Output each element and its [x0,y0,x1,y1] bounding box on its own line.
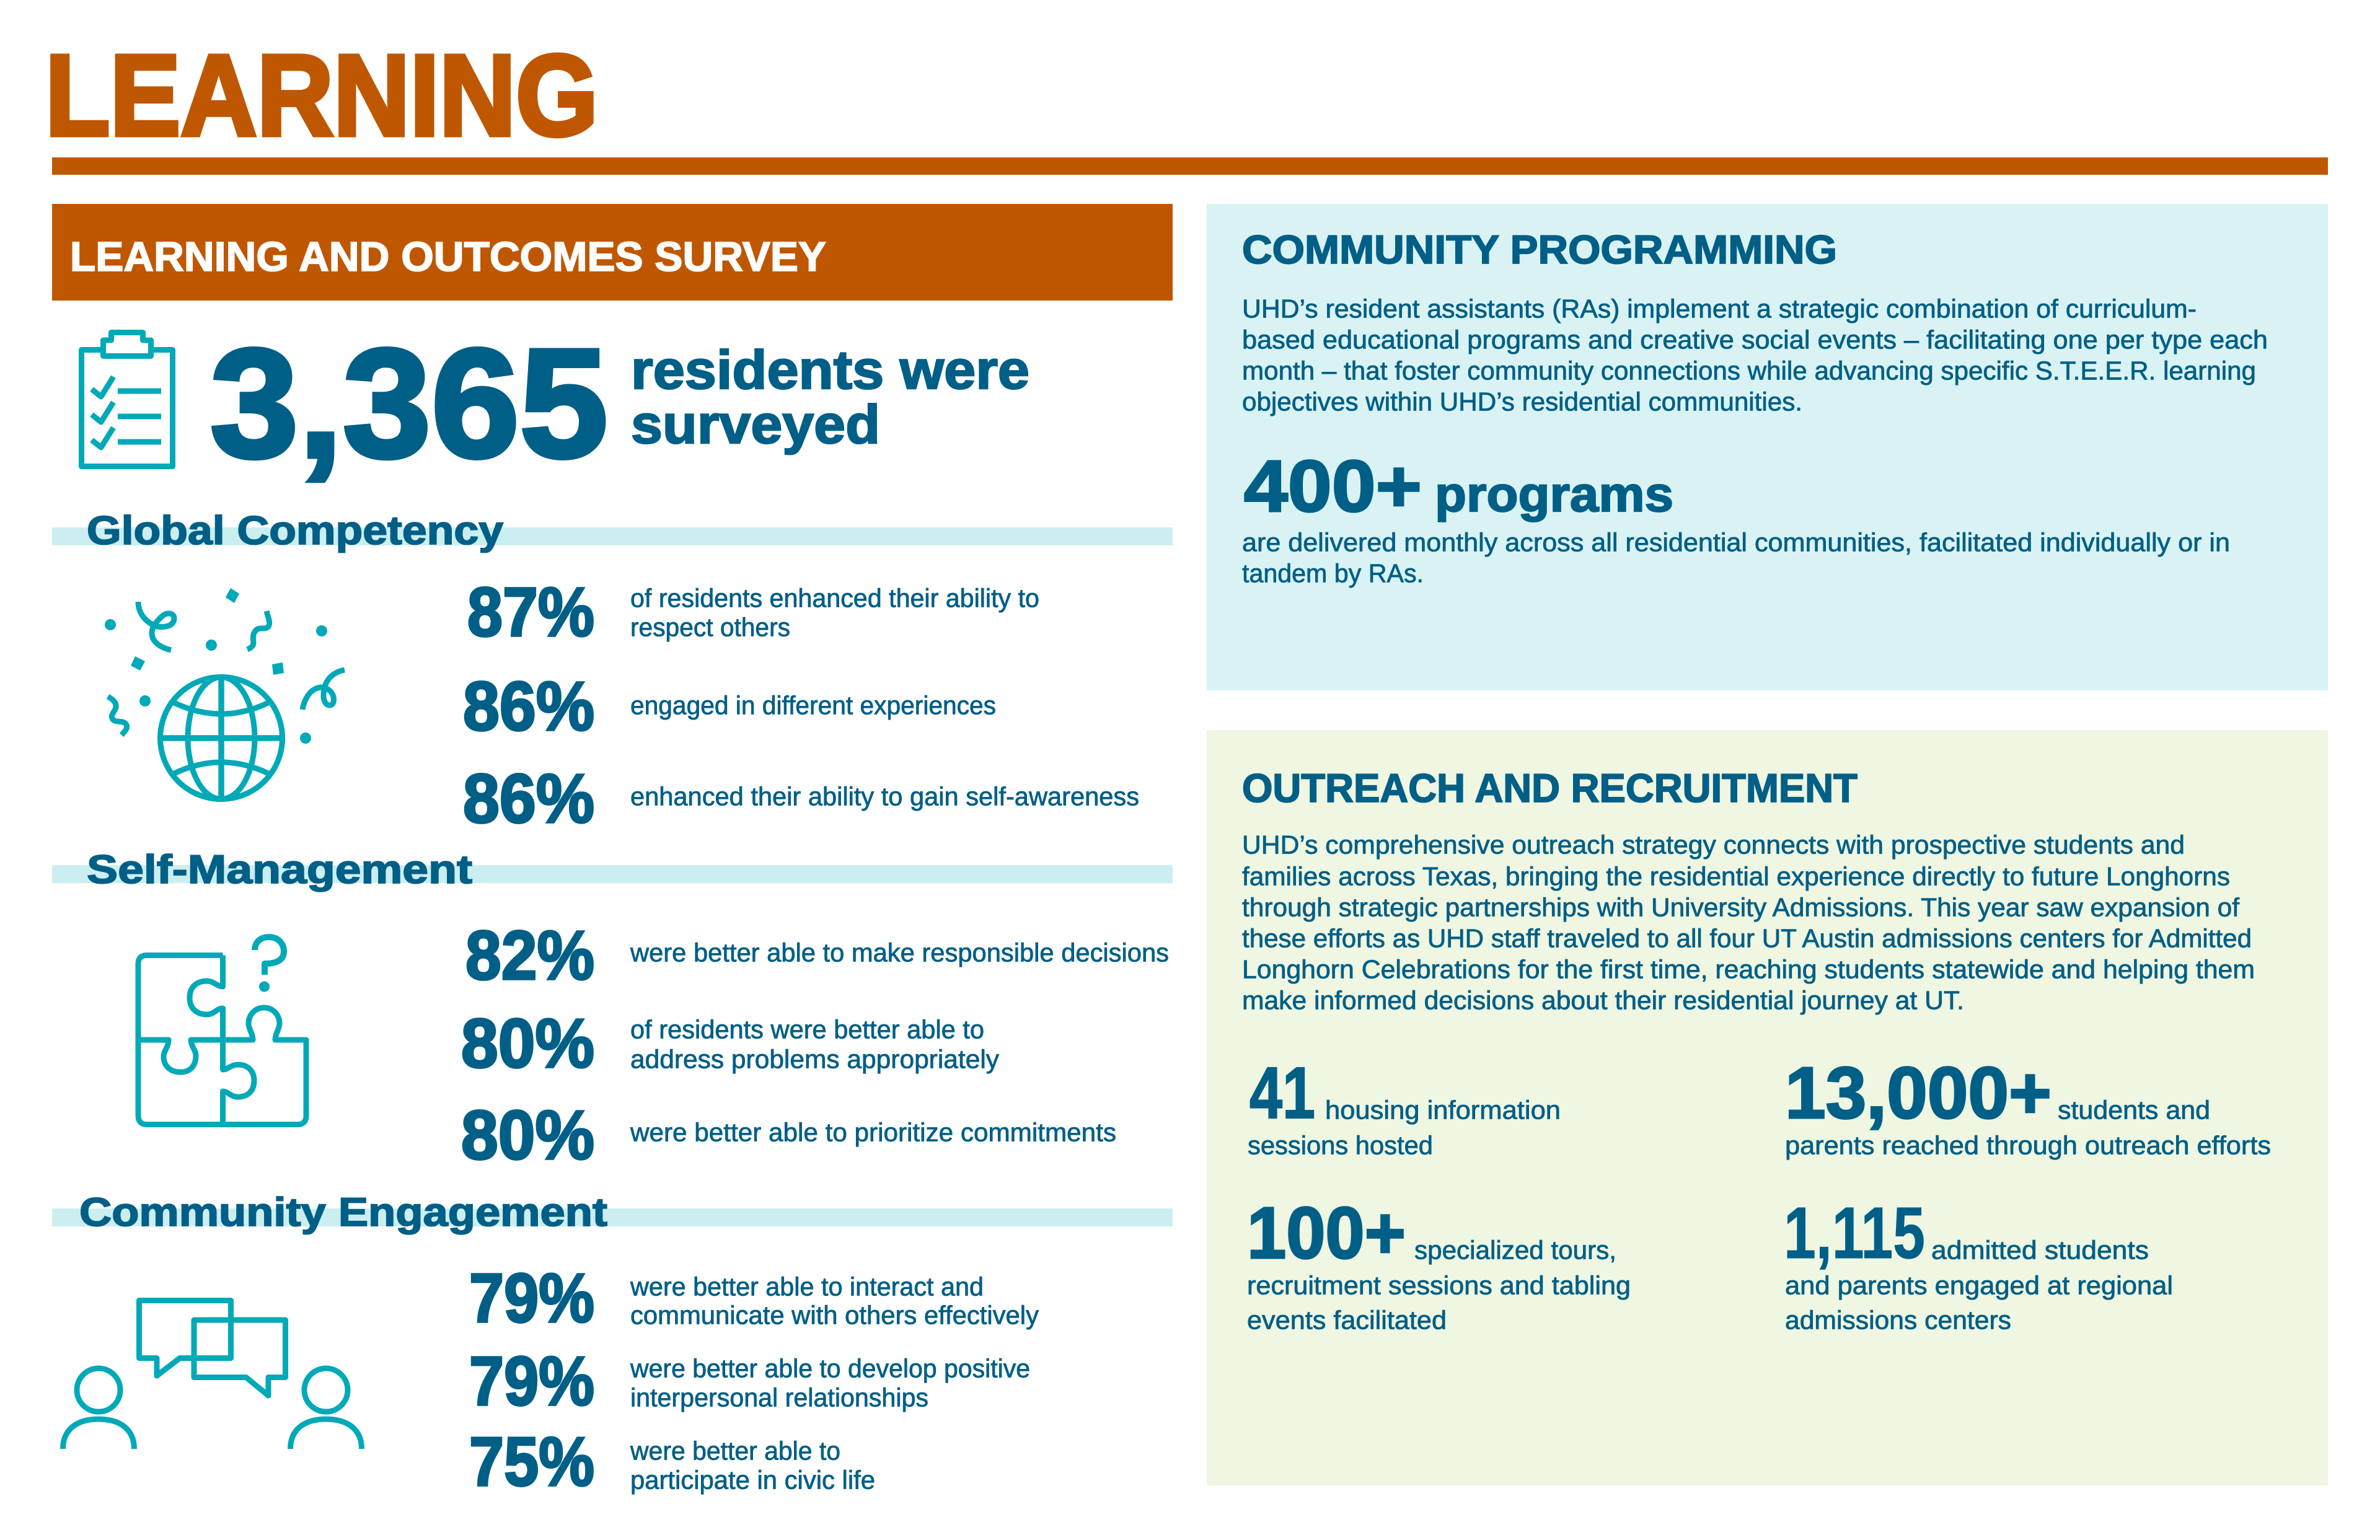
panel: learning and outcomes survey [52,204,1173,1500]
stat: 87% [467,573,1039,651]
stat: 100+ tours [1247,1192,1631,1335]
stat: 86% self-awareness: 86% [463,760,594,837]
stat: 1,115 admitted [1784,1192,2173,1335]
stat: 82%: 82% [465,917,594,994]
stat: 79% interact [469,1259,1039,1337]
stat: 13,000+ reached: 13,000+ [1785,1052,2052,1134]
stat: 41 sessions: housing information [1325,1096,1561,1124]
stat: 79% relationships: interpersonal relationships [630,1383,928,1412]
stat: 75% civic life: were better able to [630,1437,840,1465]
stat: 41 sessions [1248,1052,1561,1160]
stat: 87%: 87% [467,573,594,651]
stat: 400+ programs: 400+ [1244,446,1422,527]
panel: outreach and recruitment [1207,730,2328,1485]
stat: 80% address problems [461,1005,999,1082]
icon: people with speech bubbles [63,1300,362,1449]
section: global competency: Global Competency [87,508,503,553]
text: programming description: objectives within UHD’s residential communities. [1242,387,1802,416]
text: outreach description [1242,830,2255,1015]
survey header: LEARNING AND OUTCOMES SURVEY [70,234,826,280]
stat: 13,000+ reached: parents reached through outreach efforts [1785,1130,2271,1160]
title rule [52,157,2328,175]
stat: 82% [465,917,1169,994]
stat: 80% address problems: 80% [461,1005,594,1082]
stat: 79% relationships: were better able to develop positive [630,1353,1030,1383]
text: outreach description: make informed decisions about their residential journey at UT. [1242,985,1964,1015]
stat: 1,115 admitted: and parents engaged at regional [1785,1270,2173,1300]
stat: residents surveyed: surveyed [631,394,880,455]
stat: 1,115 admitted: admissions centers [1785,1305,2011,1335]
stat: 79% interact: 79% [469,1259,594,1337]
stat: 80% address problems: address problems appropriately [630,1045,999,1073]
text: programming description: UHD’s resident assistants (RAs) implement a strategic combination of curriculum- [1242,294,2197,323]
stat: 100+ tours: specialized tours, [1414,1236,1616,1264]
stat: 79% relationships: 79% [469,1342,594,1420]
stat: 79% interact: were better able to interact and [630,1272,984,1301]
section: self-management: Self-Management [87,847,472,892]
heading: community programming: COMMUNITY PROGRAMMING [1242,227,1837,272]
stat: residents surveyed [210,317,1029,490]
stat: 75% civic life [469,1423,875,1500]
stat: 86% experiences: engaged in different experiences [630,690,996,720]
stat: 87%: respect others [630,612,790,642]
stat: 100+ tours: recruitment sessions and tabling [1247,1270,1631,1300]
stat: 80% prioritize: were better able to prioritize commitments [630,1118,1116,1146]
stat: 1,115 admitted: admitted students [1931,1236,2149,1264]
stat: 75% civic life: participate in civic life [630,1465,875,1495]
stat: 41 sessions: sessions hosted [1248,1130,1433,1160]
text: outreach description: through strategic partnerships with University Admissions. This year saw expansion of [1242,892,2239,922]
section: self-management [52,847,1173,892]
survey header [52,204,1173,301]
stat: 86% self-awareness: enhanced their ability to gain self-awareness [630,782,1139,811]
stat: 100+ tours: 100+ [1247,1192,1406,1274]
stat: 86% experiences [463,667,996,745]
text: programming description: month – that foster community connections while advancing specific S.T.E.E.R. learning [1242,356,2256,385]
stat: residents surveyed: 3,365 [210,317,608,490]
icon: puzzle with question mark [138,937,306,1124]
stat: 1,115 admitted: 1,115 [1784,1192,1925,1274]
stat: residents surveyed: residents were [631,339,1029,400]
stat: 87%: of residents enhanced their ability to [630,584,1039,612]
stat: 100+ tours: events facilitated [1247,1305,1447,1335]
text: outreach description: these efforts as UHD staff traveled to all four UT Austin admissions centers for Admitted [1242,923,2252,953]
stat: 400+ programs: are delivered monthly across all residential communities, facilitated individually or in [1242,528,2230,557]
title: LEARNING [45,32,598,160]
stat: 79% relationships [469,1342,1030,1420]
stat: 400+ programs: programs [1435,467,1673,522]
text: programming description: based educational programs and creative social events – facilitating one per type each [1242,325,2268,354]
stat: 79% interact: communicate with others effectively [630,1300,1039,1330]
stat: 75% civic life: 75% [469,1423,594,1500]
icon: clipboard [82,332,172,466]
section: community engagement: Community Engagement [79,1189,607,1234]
text: outreach description: UHD’s comprehensive outreach strategy connects with prospective students and [1242,830,2185,859]
stat: 80% address problems: of residents were better able to [630,1015,984,1044]
text: outreach description: Longhorn Celebrations for the first time, reaching students statewide and helping them [1242,954,2255,984]
heading: outreach and recruitment: OUTREACH AND RECRUITMENT [1242,765,1858,811]
stat: 80% prioritize [461,1096,1116,1174]
stat: 13,000+ reached: students and [2058,1096,2210,1124]
section: community engagement [52,1189,1173,1234]
stat: 86% self-awareness [463,760,1139,837]
section: global competency [52,508,1173,553]
stat: 82%: were better able to make responsible decisions [630,938,1169,967]
panel: community programming [1207,204,2328,690]
icon: globe with confetti [105,588,345,799]
text: programming description [1242,294,2268,416]
stat: 13,000+ reached [1785,1052,2271,1160]
stat: 400+ programs [1242,446,2230,587]
stat: 41 sessions: 41 [1250,1052,1315,1134]
stat: 86% experiences: 86% [463,667,594,745]
stat: 80% prioritize: 80% [461,1096,594,1174]
text: outreach description: families across Texas, bringing the residential experience directly to future Longhorns [1242,861,2230,891]
stat: 400+ programs: tandem by RAs. [1242,559,1424,587]
